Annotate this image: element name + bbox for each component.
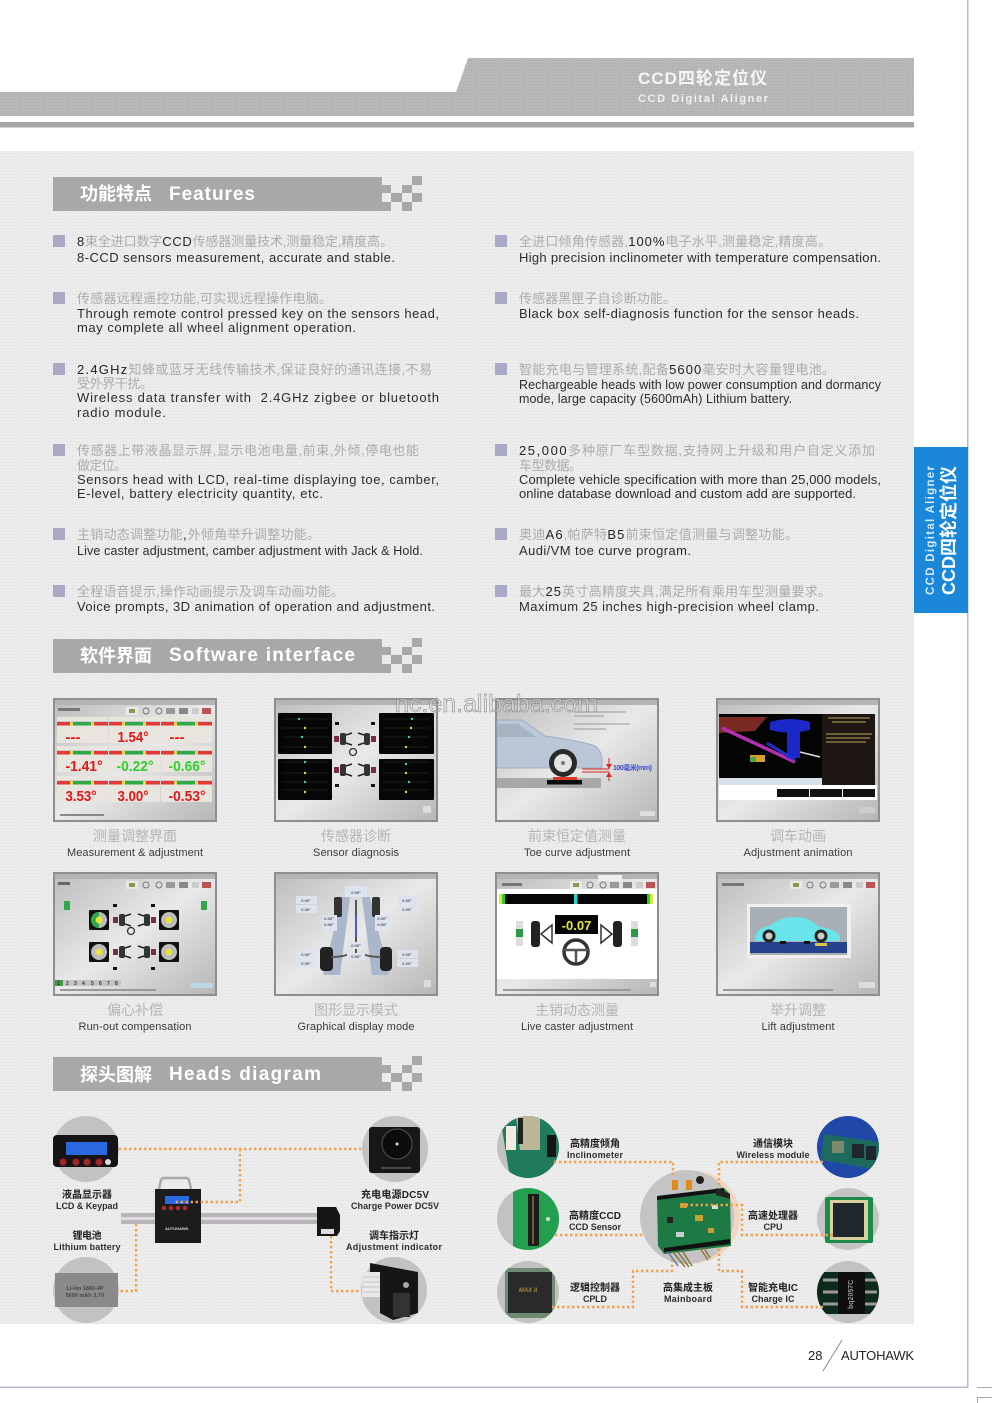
sensor head diagram	[53, 1116, 442, 1323]
feature 9: Live caster adjustment, camber adjustment with Jack & Hold.	[77, 544, 423, 558]
step numbers: 3	[74, 981, 77, 987]
mainboard diagram	[497, 1116, 879, 1323]
inclinometer callout: Inclinometer	[567, 1150, 623, 1160]
feature 1: 8束全进口数字CCD传感器测量技术,测量稳定,精度高。	[77, 234, 393, 249]
adjustment indicator callout: 调车指示灯	[369, 1229, 419, 1242]
wireless module callout	[736, 1116, 879, 1178]
lithium battery callout	[53, 1229, 120, 1323]
reading values: -1.41°	[66, 758, 102, 775]
watermark: nc.en.alibaba.com	[395, 690, 598, 718]
charge IC callout: 智能充电IC	[748, 1281, 798, 1294]
CPLD callout: 逻辑控制器	[570, 1281, 620, 1294]
CPLD callout: MAX II	[519, 1288, 537, 1294]
caption: Lift adjustment	[762, 1021, 834, 1033]
lithium battery callout: 锂电池	[72, 1229, 102, 1242]
feature 2: High precision inclinometer with temperature compensation.	[519, 250, 881, 265]
feature 10: 奥迪A6,帕萨特B5前束恒定值测量与调整功能。	[519, 527, 798, 542]
feature 8	[495, 443, 881, 501]
caption: Graphical display mode	[298, 1021, 414, 1033]
step numbers: 4	[82, 981, 85, 987]
feature 7: 做定位。	[77, 458, 127, 473]
feature 6: mode, large capacity (5600mAh) Lithium battery.	[519, 392, 792, 406]
feature 3	[53, 291, 439, 335]
step numbers: 6	[99, 981, 102, 987]
charge IC callout	[748, 1261, 879, 1323]
caption	[298, 1002, 414, 1033]
caption: 图形显示模式	[314, 1002, 398, 1018]
section heading: heads diagram: 探头图解	[80, 1065, 152, 1085]
3d suspension	[719, 717, 820, 762]
feature 11: 全程语音提示,操作动画提示及调车动画功能。	[77, 584, 344, 599]
caption	[524, 828, 630, 859]
header title: CCD Digital Aligner	[638, 93, 769, 105]
feature 2: 全进口倾角传感器,100%电子水平,测量稳定,精度高。	[519, 234, 831, 249]
feature 4	[495, 291, 859, 321]
step numbers: 2	[66, 981, 69, 987]
reading values	[66, 729, 206, 805]
chassis	[320, 897, 392, 975]
caster reading: -0.07	[562, 918, 591, 933]
caption: 测量调整界面	[93, 828, 177, 844]
value boxes: 0.00°	[301, 898, 311, 903]
feature 6	[495, 362, 882, 406]
step numbers: 5	[91, 981, 94, 987]
section heading: features: 功能特点	[80, 184, 152, 204]
adjustment indicator callout: Adjustment indicator	[346, 1242, 442, 1252]
screenshot tile: live caster adjustment	[496, 873, 658, 1033]
mainboard label	[663, 1281, 713, 1304]
reading values: -0.22°	[116, 758, 154, 775]
header band	[0, 58, 914, 128]
value boxes: 0.00°	[377, 922, 387, 927]
charge power callout	[351, 1116, 439, 1211]
caption	[762, 1002, 834, 1033]
feature 8: online database download and custom add are supported.	[519, 486, 856, 501]
caption: Live caster adjustment	[521, 1021, 633, 1033]
feature 9	[53, 527, 423, 558]
feature 7: 传感器上带液晶显示屏,显示电池电量,前束,外倾,停电也能	[77, 443, 419, 458]
value boxes: 0.00°	[351, 890, 361, 895]
LCD and keypad callout	[53, 1116, 119, 1211]
reading values: -0.66°	[168, 758, 206, 775]
value boxes: 0.00°	[402, 952, 412, 957]
section heading: features: Features	[169, 184, 255, 205]
value boxes: 0.00°	[351, 943, 361, 948]
value boxes: 0.00°	[301, 907, 311, 912]
reading values: 3.00°	[118, 788, 148, 805]
caption: Adjustment animation	[744, 847, 852, 859]
screenshot tile: sensor diagnosis	[275, 699, 437, 859]
dotted connectors	[552, 1162, 833, 1307]
side tab	[914, 447, 968, 613]
value boxes: 0.00°	[402, 907, 412, 912]
step numbers: 7	[107, 981, 110, 987]
caption	[313, 828, 400, 859]
feature 5: 受外界干扰。	[77, 376, 153, 391]
CPLD callout: CPLD	[583, 1294, 608, 1304]
step numbers: 8	[115, 981, 118, 987]
footer page number and brand: AUTOHAWK	[841, 1348, 914, 1363]
caption: 偏心补偿	[107, 1002, 163, 1018]
value boxes: 0.00°	[324, 922, 334, 927]
CPLD callout	[497, 1261, 620, 1323]
feature 12: 最大25英寸高精度夹具,满足所有乘用车型测量要求。	[519, 584, 831, 599]
screenshot tile: toe curve adjustment: 100毫米(mm)	[613, 763, 652, 772]
caption: Run-out compensation	[78, 1021, 192, 1033]
feature 3: may complete all wheel alignment operation.	[77, 320, 356, 335]
lithium battery callout: Lithium battery	[54, 1242, 120, 1252]
features list	[53, 234, 882, 614]
reading values: -0.53°	[168, 788, 206, 805]
CPU callout: CPU	[764, 1222, 782, 1232]
wireless module callout: 通信模块	[753, 1137, 793, 1150]
value boxes: 0.00°	[377, 916, 387, 921]
feature 3: 传感器远程遥控功能,可实现远程操作电脑。	[77, 291, 332, 306]
lithium battery callout: Li-ion 1860-4P	[66, 1286, 104, 1292]
section heading: heads diagram	[53, 1056, 422, 1091]
caption: 调车动画	[770, 828, 826, 844]
feature 12: Maximum 25 inches high-precision wheel clamp.	[519, 599, 819, 614]
feature 3: Through remote control pressed key on the sensors head,	[77, 306, 439, 321]
screenshot tile: adjustment animation	[717, 699, 879, 859]
adjustment indicator callout	[346, 1229, 442, 1323]
section heading: features	[53, 176, 422, 211]
caption: 主销动态测量	[535, 1002, 619, 1018]
feature 5	[53, 362, 439, 420]
side tab: CCD Digital Aligner	[925, 465, 937, 595]
feature 5: Wireless data transfer with 2.4GHz zigbee or bluetooth	[77, 390, 439, 405]
charge power callout: Charge Power DC5V	[351, 1201, 439, 1211]
feature 5: 2.4GHz知蜂或蓝牙无线传输技术,保证良好的通讯连接,不易	[77, 362, 432, 377]
caption	[78, 1002, 192, 1033]
reading values: ---	[66, 729, 80, 746]
lithium battery callout: 5600 mAh 3.7V	[66, 1293, 105, 1299]
reading values: 1.54°	[118, 729, 148, 746]
value boxes: 0.00°	[402, 961, 412, 966]
feature 6: 智能充电与管理系统,配备5600毫安时大容量锂电池。	[519, 362, 835, 377]
footer page number and brand: 28	[808, 1348, 822, 1363]
inclinometer callout: 高精度倾角	[570, 1137, 620, 1150]
section heading: software interface	[53, 638, 422, 673]
value boxes: 0.00°	[301, 961, 311, 966]
feature 1	[53, 234, 395, 265]
feature 7: Sensors head with LCD, real-time displaying toe, camber,	[77, 472, 439, 487]
mainboard	[640, 1170, 740, 1267]
step numbers: 1	[57, 981, 60, 987]
header title	[638, 68, 769, 105]
caption: Sensor diagnosis	[313, 847, 400, 859]
CCD sensor callout: 高精度CCD	[569, 1209, 621, 1222]
feature 5: radio module.	[77, 405, 166, 420]
screenshot tile: run-out compensation	[54, 873, 216, 1033]
CPU callout	[748, 1188, 879, 1250]
LCD and keypad callout: 液晶显示器	[62, 1188, 112, 1201]
reading values: 3.53°	[66, 788, 96, 805]
caption: 传感器诊断	[321, 828, 391, 844]
caption	[67, 828, 203, 859]
mainboard label: 高集成主板	[663, 1281, 713, 1294]
feature 12	[495, 584, 831, 614]
charge power callout: 充电电源DC5V	[361, 1188, 429, 1201]
header title: CCD四轮定位仪	[638, 68, 767, 88]
screenshot tile: toe curve adjustment	[496, 699, 658, 859]
wireless module callout: Wireless module	[736, 1150, 810, 1160]
feature 11	[53, 584, 435, 614]
side tab: CCD四轮定位仪	[938, 466, 959, 595]
CPU callout: 高速处理器	[748, 1209, 798, 1222]
caption	[521, 1002, 633, 1033]
CCD sensor callout: CCD Sensor	[569, 1222, 621, 1232]
value boxes: 0.00°	[301, 952, 311, 957]
inclinometer callout	[497, 1116, 623, 1178]
feature 6: Rechargeable heads with low power consumption and dormancy	[519, 378, 882, 392]
charge IC callout: bq2057C	[848, 1280, 855, 1309]
feature 7	[53, 443, 439, 501]
screenshot tile: lift adjustment	[717, 873, 879, 1033]
value boxes: 0.00°	[324, 916, 334, 921]
section heading: software interface: Software interface	[169, 645, 355, 666]
feature 4: Black box self-diagnosis function for the sensor heads.	[519, 306, 859, 321]
lift and car	[750, 917, 847, 953]
caption	[744, 828, 852, 859]
caption: 举升调整	[770, 1002, 826, 1018]
background panel	[0, 151, 914, 1324]
mainboard label: Mainboard	[664, 1294, 712, 1304]
charge IC callout: Charge IC	[752, 1294, 795, 1304]
feature 10	[495, 527, 798, 558]
screenshot tile: graphical display mode	[275, 873, 437, 1033]
caster gauge	[499, 894, 653, 904]
screenshot tile: measurement and adjustment	[54, 699, 216, 859]
feature 8: 25,000多种原厂车型数据,支持网上升级和用户自定义添加	[519, 443, 875, 458]
feature 10: Audi/VM toe curve program.	[519, 543, 691, 558]
car illustration	[497, 720, 602, 788]
LCD and keypad callout: LCD & Keypad	[56, 1201, 118, 1211]
feature 8: 车型数据。	[519, 458, 582, 473]
CCD sensor callout	[497, 1188, 621, 1250]
sensor head unit	[121, 1178, 340, 1243]
feature 1: 8-CCD sensors measurement, accurate and stable.	[77, 250, 395, 265]
feature 2	[495, 234, 881, 265]
sensor head unit: AUTOHAWK	[165, 1226, 189, 1231]
value boxes: 0.00°	[402, 898, 412, 903]
feature 7: E-level, battery electricity quantity, etc.	[77, 486, 323, 501]
feature 8: Complete vehicle specification with more than 25,000 models,	[519, 472, 881, 487]
reading values: ---	[170, 729, 184, 746]
value boxes	[296, 886, 418, 967]
feature 9: 主销动态调整功能,外倾角举升调整功能。	[77, 527, 320, 542]
footer page number and brand	[808, 1340, 914, 1371]
caster reading	[555, 915, 598, 934]
section heading: heads diagram: Heads diagram	[169, 1064, 321, 1085]
dotted connectors	[119, 1149, 362, 1291]
step numbers	[55, 980, 121, 987]
caption: 前束恒定值测量	[528, 828, 626, 844]
section heading: software interface: 软件界面	[80, 646, 152, 666]
value boxes: 0.00°	[351, 954, 361, 959]
caption: Measurement & adjustment	[67, 847, 203, 859]
feature 4: 传感器黑匣子自诊断功能。	[519, 291, 676, 306]
caption: Toe curve adjustment	[524, 847, 630, 859]
feature 11: Voice prompts, 3D animation of operation and adjustment.	[77, 599, 435, 614]
